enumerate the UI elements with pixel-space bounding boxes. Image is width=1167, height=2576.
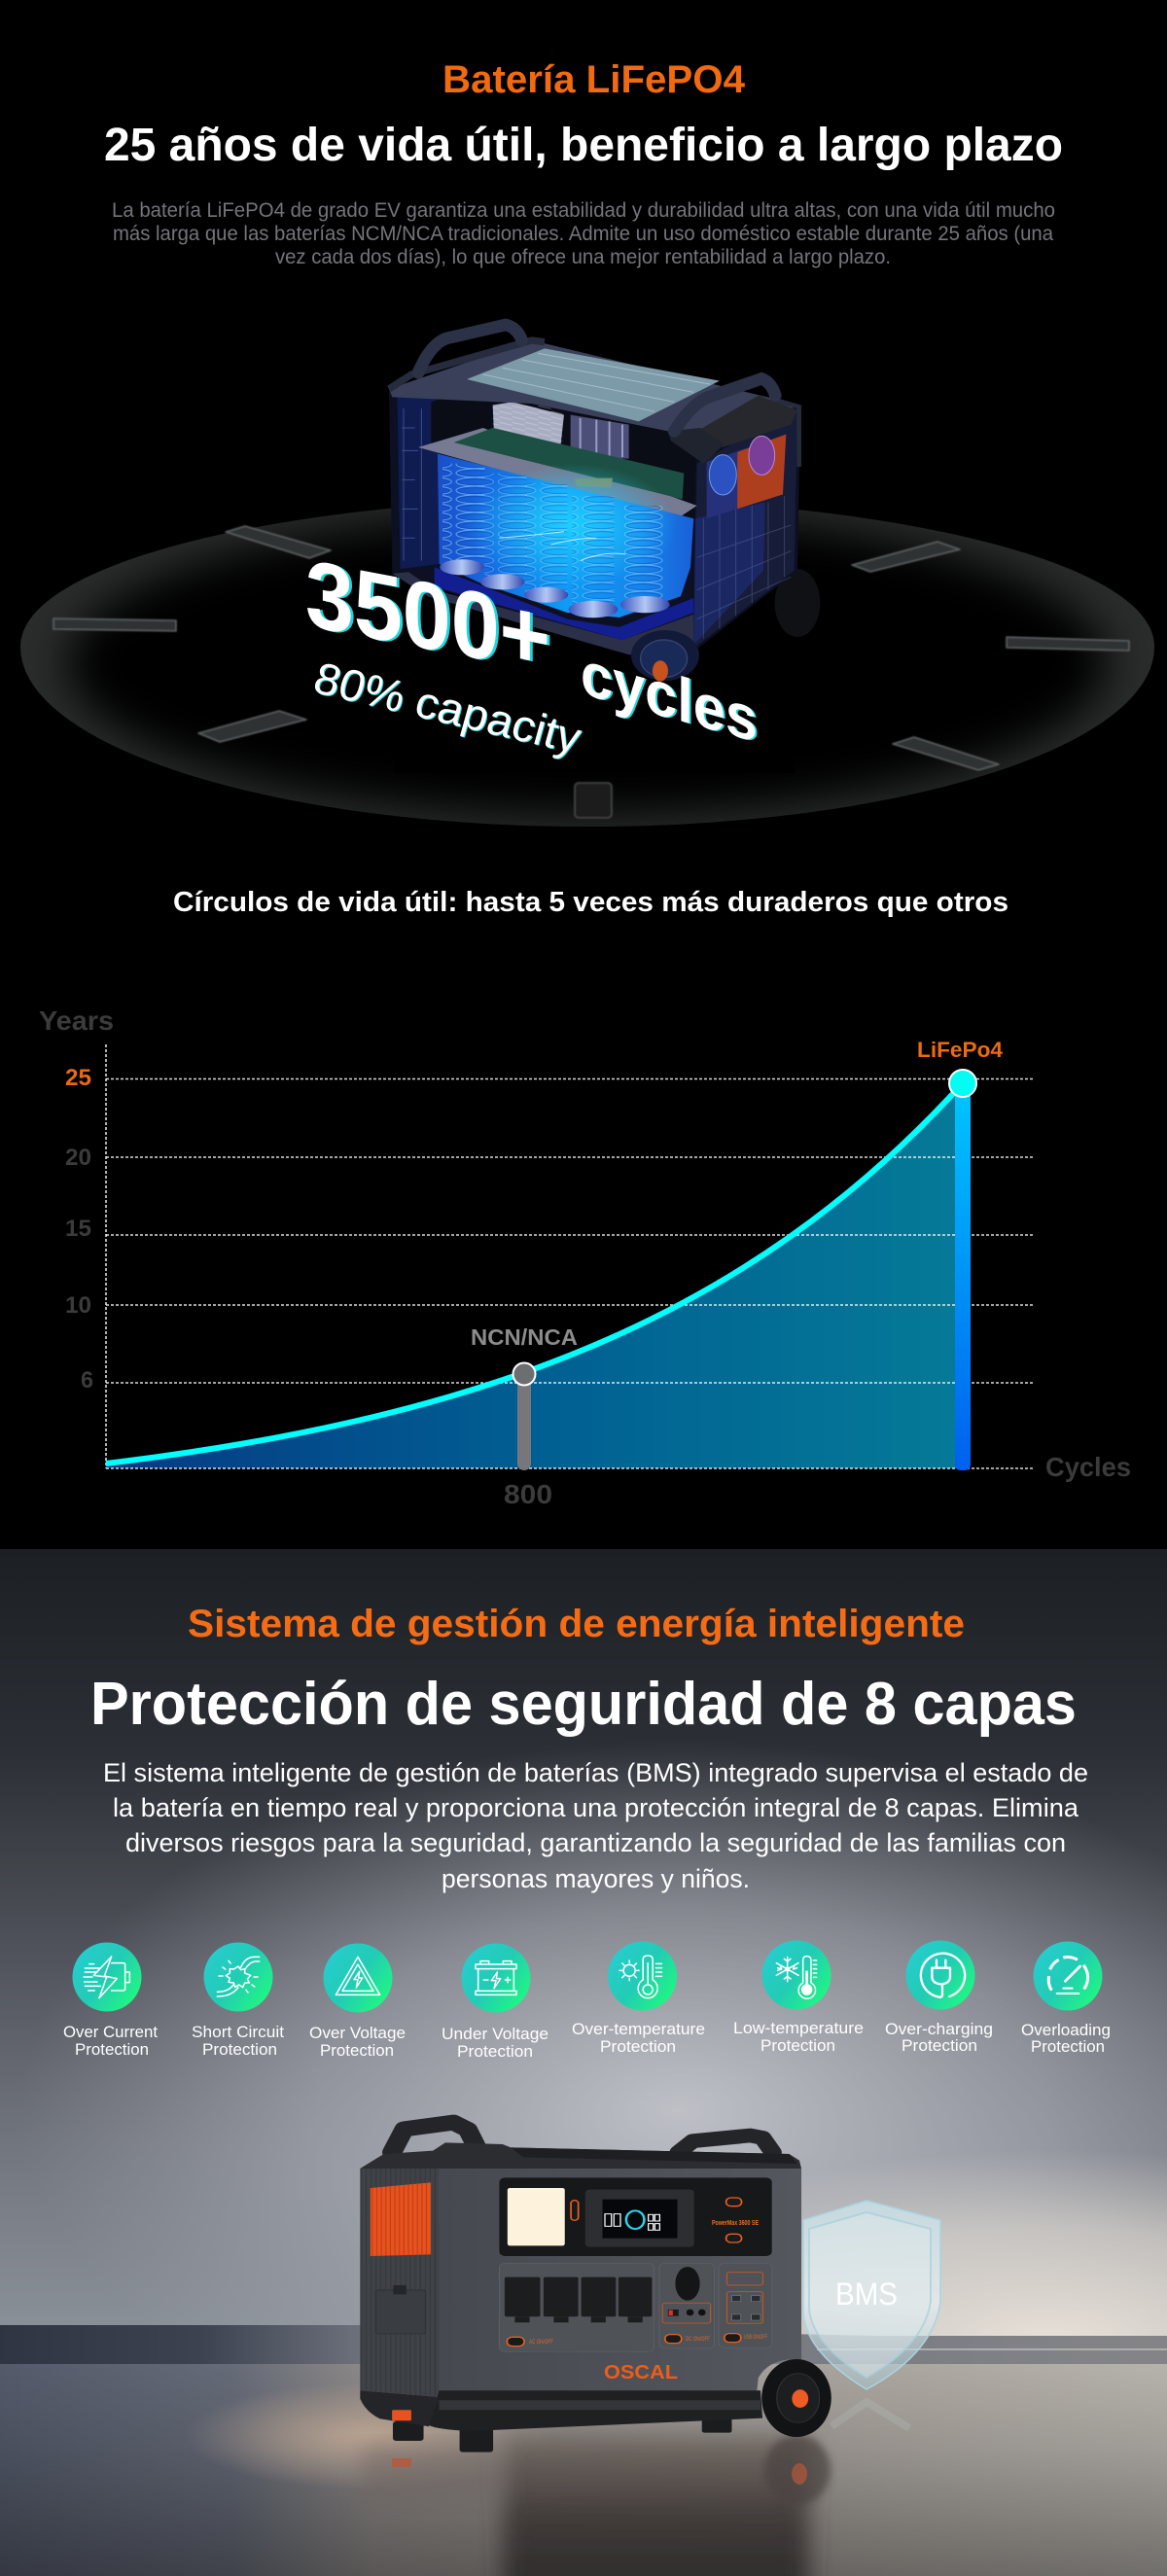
heading: cycle life comparison: Círculos de vida útil: hasta 5 veces más duraderos que otros bbox=[173, 887, 1008, 918]
icon: BMS shield bbox=[803, 2201, 940, 2428]
protection item: low temperature: Protection bbox=[760, 2036, 835, 2055]
label: port switches: USB ON/OFF bbox=[744, 2335, 767, 2341]
protection item: over current: Over Current bbox=[63, 2023, 158, 2041]
panel: smart BMS section bbox=[0, 1549, 1167, 2576]
axis labels: 20 bbox=[65, 1145, 91, 1171]
curve line bbox=[106, 1083, 963, 1464]
chart: years vs cycles curve bbox=[39, 1006, 1131, 1509]
callout: 3500+ cycles bbox=[305, 539, 760, 757]
protection item: over voltage: Protection bbox=[320, 2041, 394, 2060]
axis labels: 10 bbox=[65, 1292, 91, 1319]
background sky and floor bbox=[0, 1549, 1167, 2576]
label: model name: PowerMax 3600 SE bbox=[712, 2220, 759, 2227]
text block: battery description: vez cada dos días), lo que ofrece una mejor rentabilidad a largo plazo. bbox=[275, 246, 891, 268]
illustration: Oscal power station bbox=[360, 2123, 831, 2452]
text block: BMS description: personas mayores y niños. bbox=[442, 1864, 750, 1893]
protection item: over temperature: Over-temperature bbox=[572, 2020, 705, 2038]
NCN/NCA marker bar bbox=[517, 1374, 531, 1470]
callout: 3500+ cycles: 3500+ bbox=[305, 539, 550, 692]
USB output panel bbox=[719, 2263, 772, 2347]
axis labels: 800 bbox=[504, 1479, 552, 1509]
subtitle: Batería LiFePO4: Batería LiFePO4 bbox=[442, 58, 746, 101]
label: port switches bbox=[529, 2335, 767, 2346]
callout: 80% capacity: 80% capacity bbox=[308, 653, 586, 763]
label: port switches: AC ON/OFF bbox=[529, 2340, 553, 2346]
wheel bbox=[761, 2359, 831, 2437]
clock-style disc platform bbox=[20, 311, 1154, 827]
control panel bbox=[499, 2177, 772, 2256]
side panel bbox=[360, 2169, 440, 2397]
axis labels: 6 bbox=[81, 1367, 93, 1394]
text block: BMS description: diversos riesgos para la seguridad, garantizando la seguridad de las familias con bbox=[125, 1828, 1066, 1857]
top cap bbox=[360, 2142, 801, 2169]
AC output panel bbox=[499, 2263, 654, 2351]
protection item: low temperature: Low-temperature bbox=[733, 2019, 864, 2037]
NCN/NCA dot bbox=[513, 1363, 535, 1385]
handles bbox=[392, 2123, 773, 2152]
heading: 25 años de vida útil: 25 años de vida útil, beneficio a largo plazo bbox=[104, 120, 1063, 171]
label: port switches: DC ON/OFF bbox=[686, 2337, 710, 2343]
axis labels: 25 bbox=[65, 1065, 91, 1091]
panel: LiFePO4 battery section bbox=[0, 0, 1167, 1549]
protection item: over temperature bbox=[572, 1941, 705, 2056]
protection item: overloading: Protection bbox=[1031, 2037, 1105, 2056]
text block: battery description: La batería LiFePO4 de grado EV garantiza una estabilidad y durabilidad ultra altas, con una vida útil mucho bbox=[112, 199, 1055, 222]
callout: 3500+ cycles: cycles bbox=[583, 638, 760, 757]
protection item: over current: Protection bbox=[75, 2040, 149, 2059]
axis labels: Cycles bbox=[1045, 1452, 1131, 1482]
series label: LiFePo4: LiFePo4 bbox=[917, 1038, 1004, 1062]
protection item: over temperature: Protection bbox=[600, 2037, 676, 2056]
protection item: overloading bbox=[1021, 1941, 1111, 2056]
protection item: short circuit: Protection bbox=[202, 2040, 277, 2059]
protection item: over charging bbox=[885, 1941, 993, 2055]
text block: BMS description: El sistema inteligente de gestión de baterías (BMS) integrado supervisa el estado de bbox=[103, 1758, 1088, 1787]
DC output panel bbox=[659, 2263, 714, 2348]
axis labels bbox=[39, 1006, 1131, 1509]
protection item: over current bbox=[63, 1943, 158, 2059]
series label: NCN/NCA: NCN/NCA bbox=[471, 1324, 578, 1350]
base band bbox=[429, 2390, 762, 2431]
front face bbox=[440, 2169, 801, 2395]
protection item: short circuit: Short Circuit bbox=[192, 2023, 284, 2041]
axis labels: 15 bbox=[65, 1216, 91, 1242]
callout: 80% capacity: 80% capacity bbox=[309, 653, 587, 764]
icon: BMS shield: BMS bbox=[835, 2276, 898, 2311]
text block: BMS description bbox=[103, 1758, 1088, 1893]
feet bbox=[393, 2421, 424, 2441]
LiFePo4 dot bbox=[949, 1070, 976, 1097]
protection item: overloading: Overloading bbox=[1021, 2021, 1111, 2039]
protection item: low temperature bbox=[733, 1941, 864, 2055]
protection item: under voltage: Protection bbox=[457, 2042, 533, 2061]
area under curve bbox=[106, 1083, 963, 1468]
protection item: over voltage: Over Voltage bbox=[309, 2024, 406, 2042]
callout: 3500+ cycles: cycles bbox=[581, 637, 758, 756]
label: OSCAL logo: OSCAL bbox=[604, 2362, 678, 2383]
protection item: under voltage bbox=[442, 1943, 548, 2061]
axis labels: Years bbox=[39, 1006, 114, 1036]
callout: 3500+ cycles: 3500+ bbox=[308, 540, 553, 693]
heading: Protección de seguridad: Protección de seguridad de 8 capas bbox=[90, 1671, 1077, 1738]
text block: BMS description: la batería en tiempo real y proporciona una protección integral de 8 capas. Elimina bbox=[113, 1793, 1079, 1822]
text block: battery description: más larga que las baterías NCM/NCA tradicionales. Admite un uso doméstico estable durante 25 años (una bbox=[113, 223, 1053, 245]
protection item: over voltage bbox=[309, 1943, 406, 2060]
protection item: under voltage: Under Voltage bbox=[442, 2025, 548, 2043]
text block: battery description bbox=[112, 199, 1055, 268]
LiFePo4 marker bar bbox=[955, 1083, 971, 1470]
protection item: short circuit bbox=[192, 1943, 284, 2059]
subtitle: Sistema de gestión: Sistema de gestión de energía inteligente bbox=[188, 1603, 965, 1645]
protection item: over charging: Over-charging bbox=[885, 2020, 993, 2038]
protection item: over charging: Protection bbox=[902, 2036, 977, 2055]
illustration: transparent battery cutaway bbox=[389, 325, 820, 682]
